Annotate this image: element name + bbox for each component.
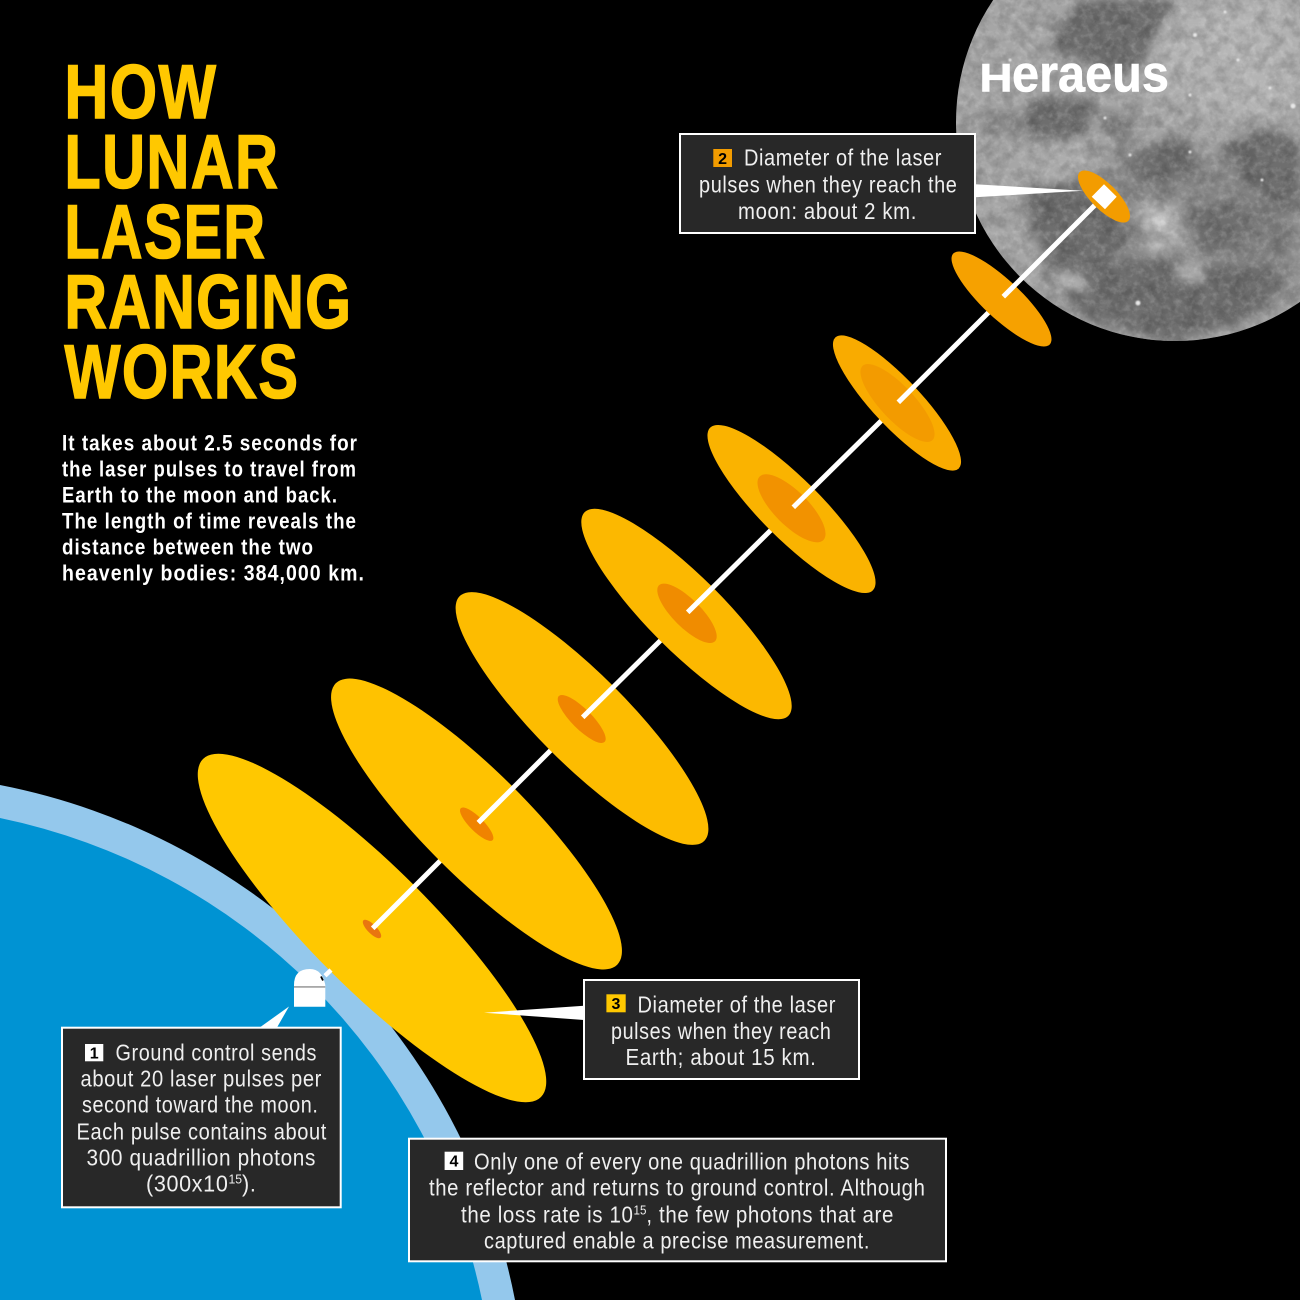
title: RANGING: [64, 260, 352, 345]
callout 1: ground control: Each pulse contains about: [76, 1118, 327, 1144]
badge 3: [606, 994, 626, 1013]
badge 1: 1: [90, 1046, 99, 1062]
earth: [0, 785, 515, 1300]
callout 2: diameter at moon: Diameter of the laser: [744, 145, 942, 171]
callout 2: diameter at moon: [680, 134, 1083, 233]
callout 3: diameter at Earth: pulses when they reach: [611, 1018, 832, 1044]
logo: Heraeus: eraeus: [1012, 46, 1169, 104]
callout 4: photon return: the loss rate is 10: [461, 1201, 655, 1227]
callout 3: diameter at Earth: [484, 980, 859, 1079]
title: [64, 50, 352, 415]
callout 1: ground control: ).: [242, 1171, 256, 1197]
callout 2: diameter at moon: pulses when they reach the: [699, 171, 958, 197]
intro text: heavenly bodies: 384,000 km.: [62, 561, 365, 586]
badge 2: [713, 149, 732, 168]
icon: observatory dome: [294, 969, 331, 1007]
intro text: distance between the two: [62, 535, 314, 560]
callout 1: ground control: (300x10: [146, 1171, 234, 1197]
moon: [950, 0, 1300, 345]
badge 4: [445, 1152, 463, 1170]
pulse 2: [299, 647, 654, 1001]
pulse 3: [428, 564, 736, 873]
callout 1: ground control: Ground control sends: [116, 1040, 317, 1066]
intro text: [62, 431, 365, 586]
pulse 1 at Earth: [161, 717, 583, 1139]
callout 4: photon return: the reflector and returns to ground control. Although: [429, 1175, 926, 1201]
pulse 6: [818, 310, 991, 485]
laser beam: pulse ellipses and ray: [161, 163, 1138, 1139]
badge 4: 4: [449, 1154, 458, 1170]
title: LUNAR: [64, 120, 280, 205]
callout 1: ground control: 300 quadrillion photons: [86, 1145, 316, 1171]
pulse 8 at the moon: [1070, 163, 1138, 230]
pulse 7: [940, 202, 1098, 358]
callout 2: diameter at moon: moon: about 2 km.: [738, 198, 917, 224]
callout 4: photon return: captured enable a precise measurement.: [484, 1227, 870, 1253]
callout 3: diameter at Earth: Earth; about 15 km.: [626, 1044, 816, 1070]
badge 1: [85, 1044, 103, 1062]
callout 1: ground control: second toward the moon.: [82, 1092, 318, 1118]
callout 3: diameter at Earth: Diameter of the laser: [638, 991, 836, 1017]
logo: Heraeus: H: [980, 56, 1012, 100]
pulse 4: [558, 486, 815, 742]
title: LASER: [64, 190, 266, 275]
badge 2: 2: [718, 151, 727, 168]
icon: reflector on the moon: [1092, 184, 1117, 209]
pulse 5: [689, 406, 894, 612]
callout 4: photon return: [409, 1139, 946, 1261]
callout 1: ground control: 15: [228, 1172, 242, 1187]
intro text: Earth to the moon and back.: [62, 483, 338, 508]
badge 3: 3: [612, 996, 621, 1013]
title: HOW: [64, 50, 218, 135]
callout 1: ground control: about 20 laser pulses per: [80, 1066, 322, 1092]
callout 4: photon return: 15: [634, 1202, 646, 1217]
intro text: It takes about 2.5 seconds for: [62, 431, 358, 456]
callout 4: photon return: Only one of every one quadrillion photons hits: [474, 1148, 910, 1174]
title: WORKS: [64, 330, 300, 415]
callout 1: ground control: [62, 1006, 341, 1207]
intro text: The length of time reveals the: [62, 509, 357, 534]
intro text: the laser pulses to travel from: [62, 457, 357, 482]
callout 4: photon return: , the few photons that are: [646, 1201, 894, 1227]
